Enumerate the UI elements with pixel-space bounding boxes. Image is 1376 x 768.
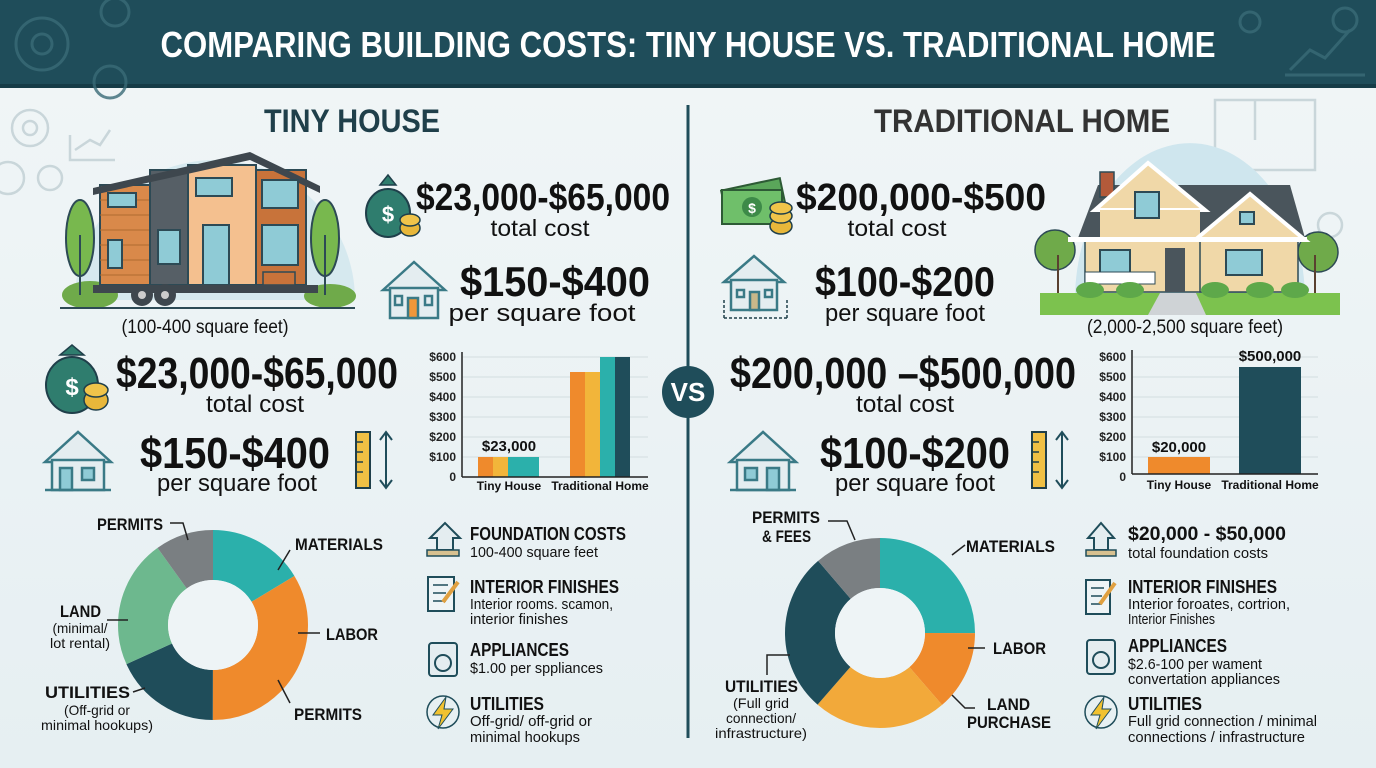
bar chart: tiny vs traditional (left): $500 <box>429 370 456 384</box>
caption: traditional size: (2,000-2,500 square feet) <box>1087 317 1283 338</box>
bar chart: tiny vs traditional (right) <box>1099 348 1319 492</box>
icon: house with arrows <box>724 256 787 318</box>
donut chart: tiny house cost breakdown: lot rental) <box>50 635 110 651</box>
stat: tiny per sq ft top: $150-$400 <box>460 258 650 305</box>
caption: tiny size: (100-400 square feet) <box>122 317 288 338</box>
bar chart: tiny vs traditional (left): $400 <box>429 390 456 404</box>
bar chart: tiny vs traditional (right): $600 <box>1099 350 1126 364</box>
stat: tiny total cost: total cost <box>206 391 304 418</box>
stat: tiny per sq ft top <box>448 258 650 327</box>
item: foundation cost range <box>1086 523 1286 562</box>
stat: traditional total cost top: total cost <box>848 215 947 241</box>
donut chart: traditional home cost breakdown: connection/ <box>726 710 796 726</box>
item: foundation cost range: $20,000 - $50,000 <box>1128 524 1286 545</box>
icon: cash and coins: $ <box>748 200 756 216</box>
icon: house second <box>45 432 111 490</box>
donut chart: tiny house cost breakdown: (minimal/ <box>52 620 108 636</box>
donut chart: tiny house cost breakdown: PERMITS <box>97 515 163 534</box>
item: interior finishes <box>428 577 619 628</box>
donut chart: traditional home cost breakdown: PERMITS <box>752 508 820 527</box>
donut chart: traditional home cost breakdown <box>715 508 1055 741</box>
icon: money bag second: $ <box>65 374 79 401</box>
stat: traditional per sq ft top: $100-$200 <box>815 258 995 305</box>
bar chart: tiny vs traditional (right): Traditional Home <box>1221 478 1319 492</box>
stat: tiny total cost top: total cost <box>490 215 590 241</box>
bar chart: tiny vs traditional (left): $600 <box>429 350 456 364</box>
item: interior finishes: INTERIOR FINISHES <box>470 577 619 597</box>
illustration: tiny house on trailer <box>60 152 356 309</box>
item: foundation costs: FOUNDATION COSTS <box>470 524 626 544</box>
bar chart: tiny vs traditional (right): 0 <box>1119 470 1126 484</box>
item: appliances: $1.00 per sppliances <box>470 660 603 677</box>
donut chart: tiny house cost breakdown: LAND <box>60 602 101 621</box>
donut chart: traditional home cost breakdown: (Full grid <box>733 695 789 711</box>
icon: house top <box>383 262 445 318</box>
item: appliances: APPLIANCES <box>1128 636 1227 656</box>
stat: tiny total cost top <box>416 177 670 241</box>
donut chart: traditional home cost breakdown: PURCHASE <box>967 713 1051 732</box>
item: appliances: convertation appliances <box>1128 671 1280 688</box>
list: traditional home cost items <box>1085 523 1317 746</box>
stat: tiny total cost <box>116 349 398 418</box>
item: utilities: Off-grid/ off-grid or <box>470 713 592 730</box>
item: appliances <box>429 640 603 677</box>
item: utilities: Full grid connection / minimal <box>1128 713 1317 730</box>
icon: cash and coins <box>721 178 792 234</box>
bar chart: tiny vs traditional (left): Traditional Home <box>551 479 649 493</box>
stat: traditional total cost top <box>796 177 1046 241</box>
item: appliances <box>1087 636 1280 688</box>
item: utilities <box>427 694 592 746</box>
VS badge: VS <box>671 377 705 407</box>
item: utilities: minimal hookups <box>470 729 580 746</box>
icon: ruler left <box>356 432 392 488</box>
icon: money bag top <box>366 175 420 237</box>
icon: money bag second <box>46 345 108 413</box>
bar chart: tiny vs traditional (right): $500 <box>1099 370 1126 384</box>
title: COMPARING BUILDING COSTS: TINY HOUSE VS. TRADITIONAL HOME <box>160 24 1216 65</box>
bar chart: tiny vs traditional (right): $20,000 <box>1152 439 1206 456</box>
item: interior finishes: Interior foroates, cortrion, <box>1128 596 1290 613</box>
item: foundation cost range: total foundation costs <box>1128 545 1268 562</box>
stat: traditional total cost: $200,000 –$500,000 <box>730 349 1076 398</box>
item: appliances: APPLIANCES <box>470 640 569 660</box>
bar chart: tiny vs traditional (left): 0 <box>449 470 456 484</box>
stat: traditional per sq ft <box>820 429 1010 497</box>
stat: tiny per sq ft top: per square foot <box>448 300 636 327</box>
bar chart: tiny vs traditional (left) <box>429 350 649 493</box>
bar chart: tiny vs traditional (right): $500,000 <box>1239 348 1301 365</box>
stat: tiny total cost top: $23,000-$65,000 <box>416 177 670 219</box>
list: tiny house cost items <box>427 523 626 746</box>
donut chart: traditional home cost breakdown: & FEES <box>762 527 811 546</box>
illustration: traditional house <box>1035 143 1340 315</box>
stat: traditional total cost top: $200,000-$500 <box>796 177 1046 219</box>
donut chart: tiny house cost breakdown: (Off-grid or <box>64 702 130 718</box>
decorative background icons <box>0 100 1342 237</box>
item: interior finishes: INTERIOR FINISHES <box>1128 577 1277 597</box>
donut chart: traditional home cost breakdown: UTILITIES <box>725 677 798 696</box>
stat: traditional total cost: total cost <box>856 391 954 418</box>
bar chart: tiny vs traditional (right): $200 <box>1099 430 1126 444</box>
donut chart: tiny house cost breakdown: PERMITS <box>294 705 362 724</box>
donut chart: tiny house cost breakdown: minimal hookups) <box>41 717 153 733</box>
donut chart: tiny house cost breakdown <box>41 515 383 733</box>
item: utilities: UTILITIES <box>470 694 544 714</box>
donut chart: traditional home cost breakdown: infrastructure) <box>715 725 807 741</box>
stat: traditional per sq ft: per square foot <box>835 470 995 497</box>
item: foundation costs <box>427 523 626 561</box>
item: utilities: connections / infrastructure <box>1128 729 1305 746</box>
item: interior finishes: interior finishes <box>470 611 568 628</box>
center divider <box>686 105 690 738</box>
bar chart: tiny vs traditional (right): $100 <box>1099 450 1126 464</box>
bar chart: tiny vs traditional (left): $200 <box>429 430 456 444</box>
item: appliances: $2.6-100 per wament <box>1128 656 1263 673</box>
heading: tiny house: TINY HOUSE <box>264 103 440 139</box>
item: interior finishes: Interior Finishes <box>1128 611 1215 628</box>
icon: money bag top: $ <box>382 202 394 227</box>
item: foundation costs: 100-400 square feet <box>470 544 599 561</box>
donut chart: tiny house cost breakdown: LABOR <box>326 625 378 644</box>
bar chart: tiny vs traditional (right): $300 <box>1099 410 1126 424</box>
donut chart: traditional home cost breakdown: LABOR <box>993 639 1046 658</box>
heading: traditional home: TRADITIONAL HOME <box>874 103 1170 139</box>
header banner <box>0 0 1376 98</box>
donut chart: tiny house cost breakdown: MATERIALS <box>295 535 383 554</box>
item: utilities <box>1085 694 1317 746</box>
stat: traditional per sq ft top <box>815 258 995 327</box>
donut chart: traditional home cost breakdown: LAND <box>987 695 1030 714</box>
bar chart: tiny vs traditional (left): $23,000 <box>482 438 536 455</box>
bar chart: tiny vs traditional (right): Tiny House <box>1147 478 1212 492</box>
bar chart: tiny vs traditional (left): $100 <box>429 450 456 464</box>
bar chart: tiny vs traditional (left): $300 <box>429 410 456 424</box>
donut chart: traditional home cost breakdown: MATERIALS <box>966 537 1055 556</box>
VS badge <box>662 366 714 418</box>
stat: tiny per sq ft: $150-$400 <box>140 429 330 478</box>
stat: traditional total cost <box>730 349 1076 418</box>
item: utilities: UTILITIES <box>1128 694 1202 714</box>
stat: tiny per sq ft: per square foot <box>157 470 317 497</box>
stat: tiny total cost: $23,000-$65,000 <box>116 349 398 398</box>
stat: traditional per sq ft: $100-$200 <box>820 429 1010 478</box>
donut chart: tiny house cost breakdown: UTILITIES <box>45 683 130 702</box>
stat: traditional per sq ft top: per square foot <box>825 300 985 327</box>
stat: tiny per sq ft <box>140 429 330 497</box>
icon: ruler right <box>1032 432 1068 488</box>
icon: house right second <box>730 432 796 490</box>
item: interior finishes <box>1086 577 1290 628</box>
bar chart: tiny vs traditional (right): $400 <box>1099 390 1126 404</box>
item: interior finishes: Interior rooms. scamon, <box>470 596 613 613</box>
bar chart: tiny vs traditional (left): Tiny House <box>477 479 542 493</box>
